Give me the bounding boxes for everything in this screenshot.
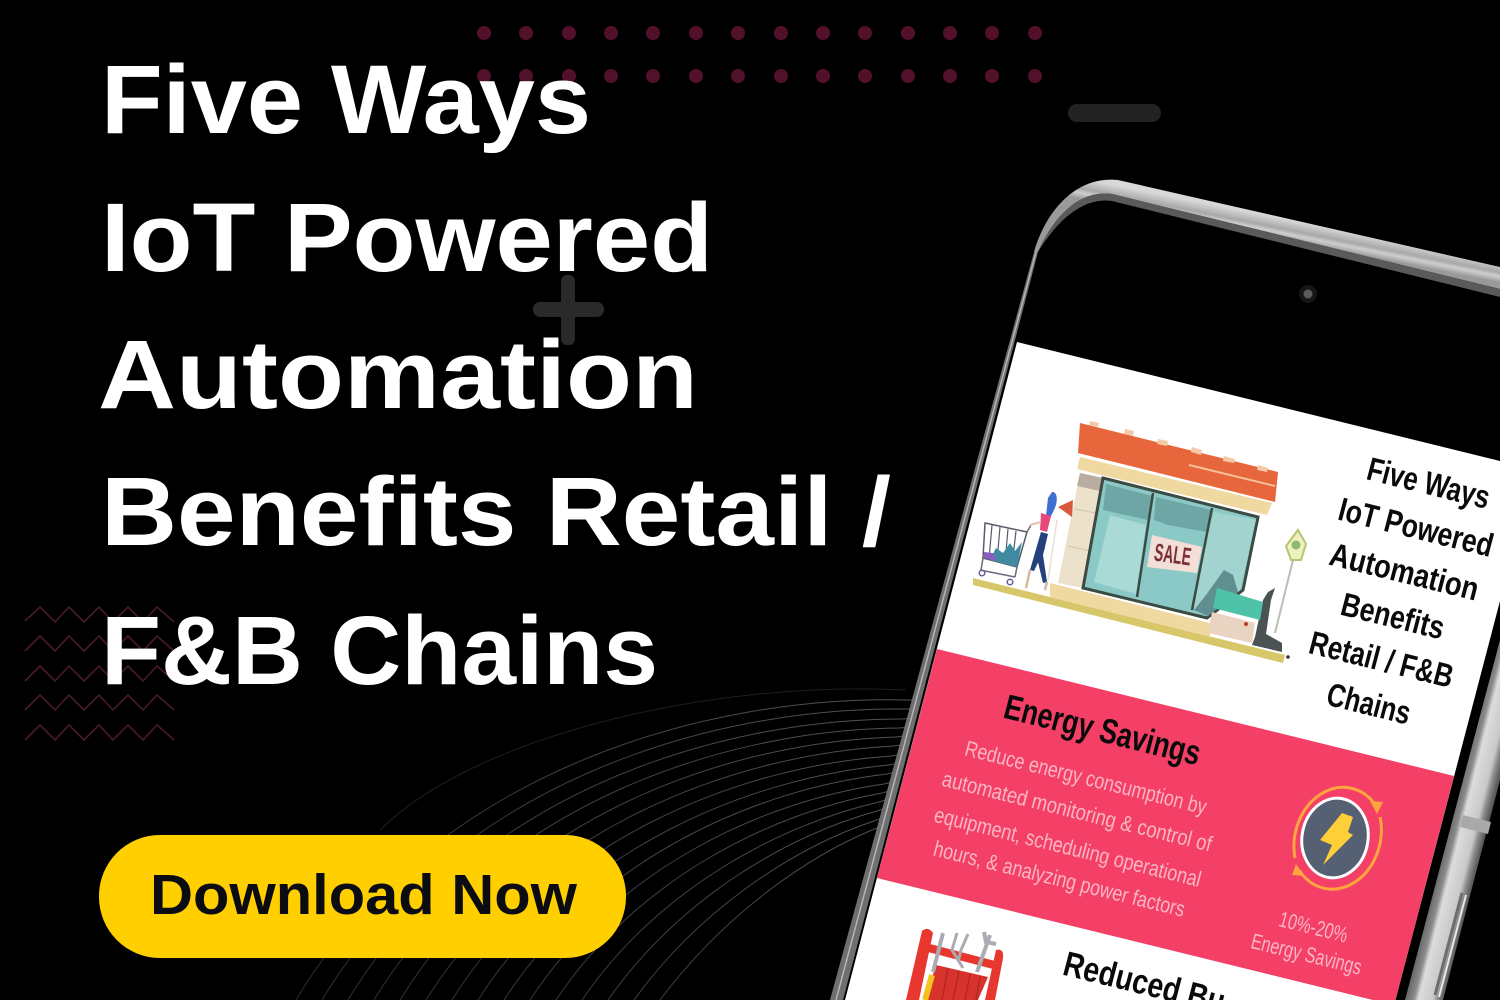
ground [973,578,1285,663]
infographic title: Benefits [1337,585,1449,646]
orange cycle arrows [1294,787,1381,889]
lightning bolt [1320,813,1353,865]
curved line wave decoration [296,689,946,1000]
plus decoration [533,275,604,345]
energy savings description: equipment, scheduling operational [932,802,1204,892]
phone top frame [1034,180,1500,297]
awning ledge [1077,457,1272,515]
title: IoT Powered [101,183,713,292]
energy savings description: hours, & analyzing power factors [931,836,1188,922]
title: Benefits Retail / [101,457,891,566]
orange roof [1078,421,1278,502]
infographic title [1309,458,1494,724]
energy savings description: Reduce energy consumption by [962,736,1210,819]
phone left edge [830,252,1038,1000]
phone body [832,180,1500,1000]
pink energy savings panel [877,649,1454,1000]
download button: Download Now [150,863,578,927]
pavement [1050,583,1210,637]
bench and bins [1208,588,1290,659]
dot grid decoration [477,26,1042,83]
storefront illustration [973,421,1306,663]
screen white background [845,342,1500,1000]
infographic title: Retail / F&B [1305,624,1458,695]
energy savings stat [1251,912,1361,976]
phone screen text [934,458,1494,1000]
tool rack icon [906,929,1003,1000]
left pillar [1058,473,1103,588]
minus decoration [1068,104,1161,122]
infographic title: Chains [1323,675,1415,731]
energy savings description [934,740,1214,916]
shop window [1083,478,1258,618]
phone camera [1299,285,1317,303]
energy savings description: automated monitoring & control of [939,766,1216,857]
energy savings stat: Energy Savings [1248,928,1364,980]
title: F&B Chains [101,596,658,705]
shopper figure [1026,492,1073,590]
energy savings stat: 10%-20% [1276,907,1351,947]
title: Five Ways [101,45,591,154]
sale sign: SALE [1152,539,1193,571]
icon circle [1296,793,1374,883]
recycle sign [1275,530,1306,633]
energy icon [1292,787,1383,889]
shopping cart [979,523,1031,585]
sale sign [1147,535,1202,573]
arrow heads [1292,801,1383,876]
phone mockup [830,180,1500,1000]
title [98,45,891,705]
energy savings heading: Energy Savings [1000,687,1205,773]
zigzag decoration [25,607,174,740]
title: Automation [98,320,698,429]
download button [99,835,626,958]
phone right rail [1405,640,1500,1000]
